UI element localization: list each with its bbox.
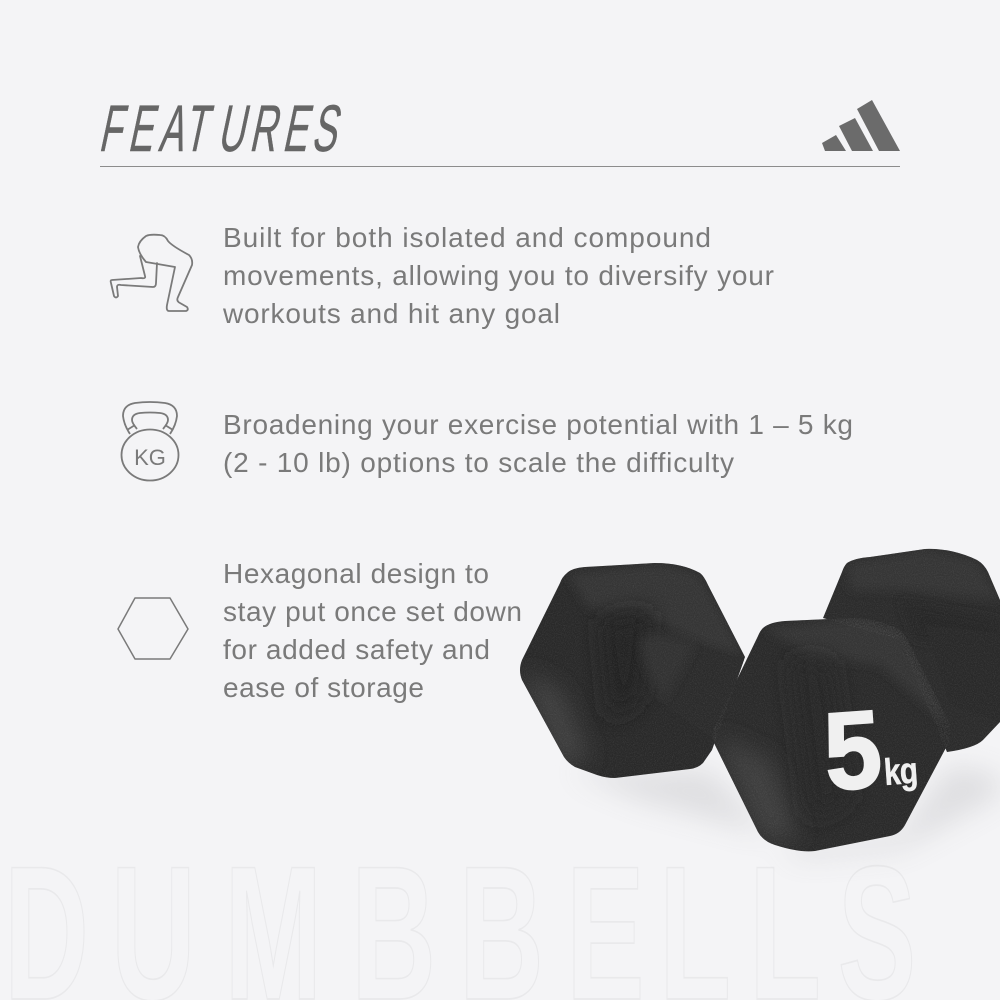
feature row: movements xyxy=(111,222,774,329)
text: hexagonal design description xyxy=(223,558,522,703)
text: movements description: Built for both isolated and compound xyxy=(223,222,711,253)
label: 5 kg: kg xyxy=(883,751,918,794)
heading: FEATURES: FEATURES xyxy=(95,92,348,166)
image: pair of dumbbells xyxy=(515,545,1000,858)
label: 5 kg xyxy=(820,687,918,814)
icon: kettlebell xyxy=(122,402,178,480)
icon: adidas logo xyxy=(822,100,900,151)
back dumbbell handle xyxy=(925,625,1000,722)
handle xyxy=(736,660,744,682)
left head xyxy=(515,560,750,780)
feature row: weight options xyxy=(122,402,853,480)
text: hexagonal design description: for added safety and xyxy=(223,634,490,665)
floor shadows xyxy=(570,765,1000,858)
surface grain xyxy=(515,545,1000,855)
feature row: hexagonal design xyxy=(118,558,522,703)
heading rule xyxy=(100,166,900,167)
text: weight options description: Broadening your exercise potential with 1 – 5 kg xyxy=(223,409,853,440)
text: hexagonal design description: stay put once set down xyxy=(223,596,522,627)
back dumbbell xyxy=(820,545,1000,755)
icon: lunge legs xyxy=(111,235,192,311)
front head xyxy=(710,615,955,855)
text: movements description: movements, allowing you to diversify your xyxy=(223,260,774,291)
text: hexagonal design description: Hexagonal design to xyxy=(223,558,489,589)
text: weight options description: (2 - 10 lb) options to scale the difficulty xyxy=(223,447,734,478)
text: hexagonal design description: ease of storage xyxy=(223,672,424,703)
label: 5 kg: 5 xyxy=(820,687,885,814)
text: weight options description xyxy=(223,409,853,478)
text: movements description: workouts and hit any goal xyxy=(222,298,560,329)
icon: hexagon xyxy=(118,598,188,659)
icon: kettlebell: KG xyxy=(134,445,166,470)
text: movements description xyxy=(222,222,774,329)
